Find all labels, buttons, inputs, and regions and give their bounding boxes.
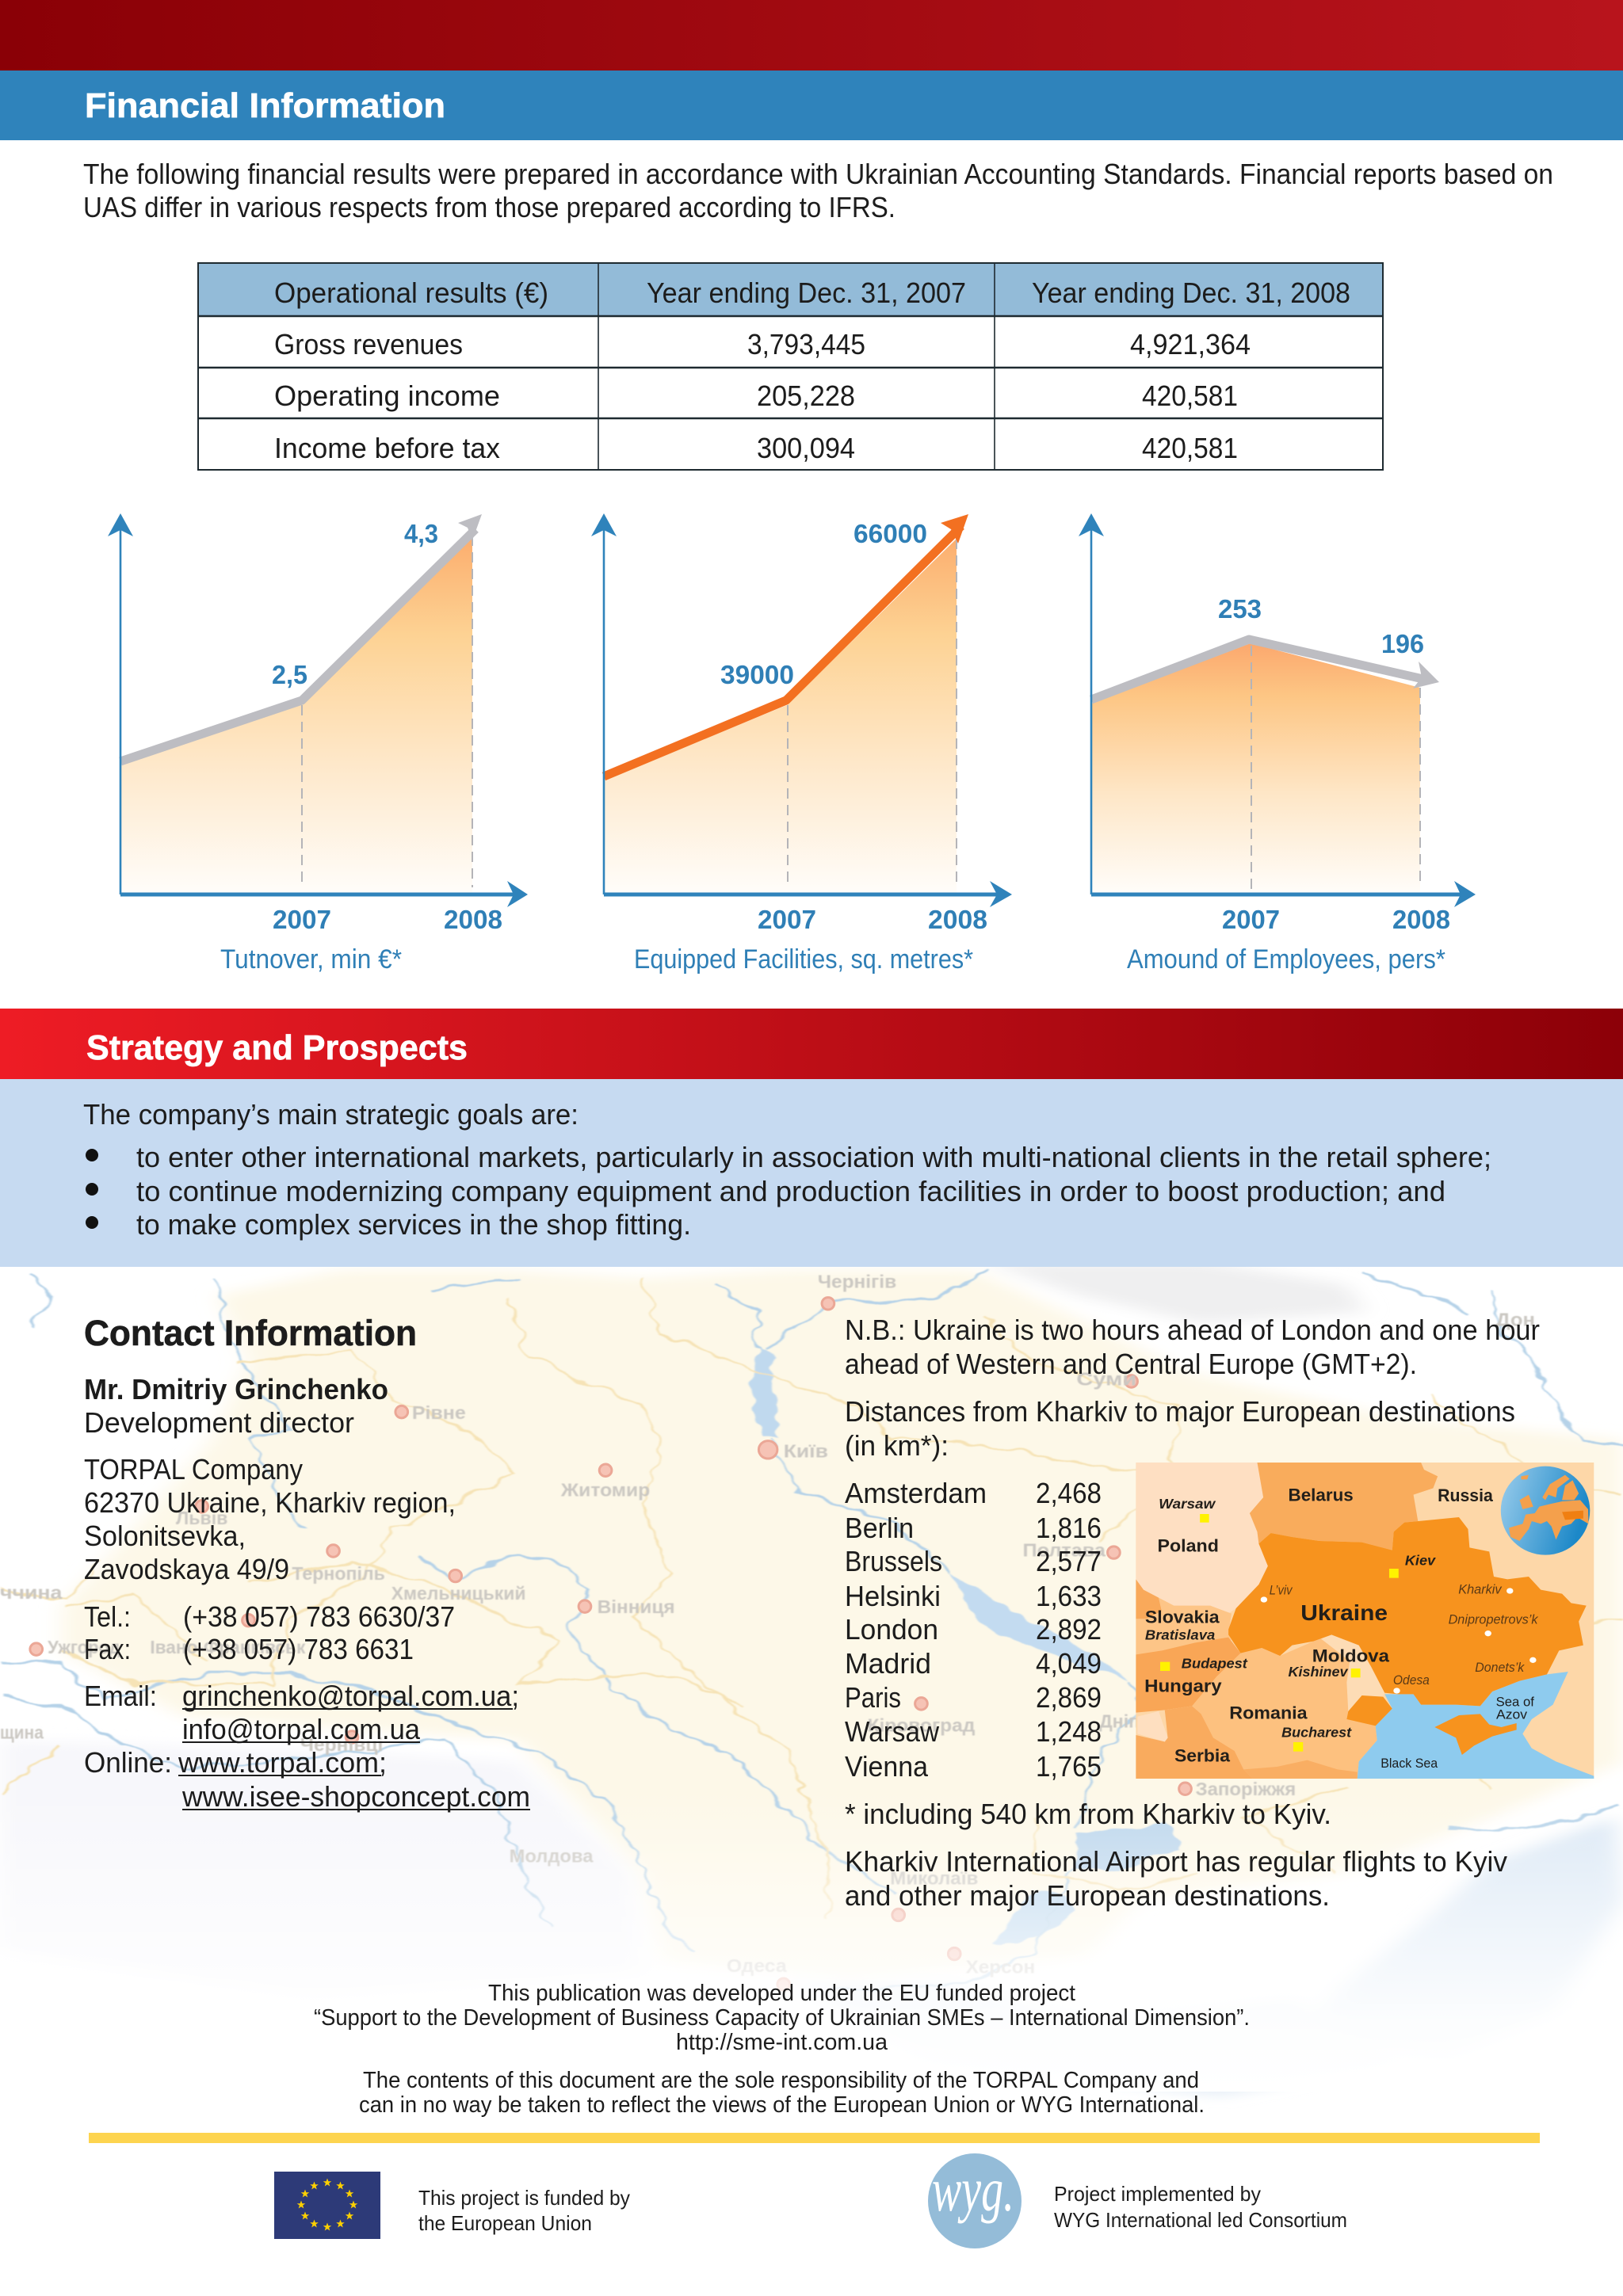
text block: implementation note: Project implemented by	[1054, 2182, 1261, 2206]
phone and fax: (+38 057) 783 6630/37	[183, 1600, 455, 1633]
capital labels: Kishinev	[1289, 1664, 1349, 1680]
background map of Ukraine: щина	[0, 1723, 44, 1743]
map: Ukraine and neighbouring countries	[1136, 1463, 1594, 1779]
email and web links: grinchenko@torpal.com.ua;	[182, 1680, 519, 1712]
background map of Ukraine: Хмельницький	[391, 1584, 526, 1604]
background map of Ukraine: Кіровоград	[868, 1715, 975, 1736]
panel: operational results table: Operating income	[274, 379, 500, 412]
background map of Ukraine: Дон	[1495, 1310, 1535, 1330]
city labels: Odesa	[1393, 1672, 1430, 1688]
table: distances from Kharkiv: 2,577	[1036, 1545, 1102, 1577]
text block: Kyiv footnote and airport	[845, 1798, 1507, 1912]
table: distances from Kharkiv: Paris	[845, 1681, 901, 1714]
table: distances from Kharkiv: 2,869	[1036, 1681, 1102, 1714]
country labels: Hungary	[1144, 1677, 1223, 1696]
background map of Ukraine: Суми	[1076, 1369, 1136, 1390]
background map of Ukraine: Житомир	[560, 1481, 650, 1501]
background map of Ukraine: Чернівці	[300, 1735, 383, 1755]
table: distances from Kharkiv: Brussels	[845, 1545, 942, 1577]
city labels: Donets’k	[1475, 1660, 1525, 1675]
heading: Contact Information: Contact Information	[84, 1313, 417, 1353]
chart: turnover	[108, 513, 528, 974]
heading band: Financial Information	[0, 71, 1623, 140]
phone and fax: (+38 057) 783 6631	[183, 1633, 414, 1665]
panel: operational results table: 300,094	[757, 432, 855, 464]
text block: introduction: UAS differ in various respects from those prepared according to IFRS.	[83, 191, 896, 223]
background map of Ukraine: Дніпр	[1099, 1711, 1151, 1732]
chart: amount of employees: 2007	[1222, 905, 1280, 934]
email and web links: info@torpal.com.ua	[182, 1713, 421, 1745]
panel: red top band	[0, 0, 1623, 71]
sea labels: Sea of	[1496, 1694, 1535, 1709]
table: distances from Kharkiv: 2,468	[1036, 1477, 1102, 1509]
capital labels: Bucharest	[1281, 1725, 1352, 1740]
email and web links: www.isee-shopconcept.com	[181, 1780, 530, 1813]
text block: publication disclaimer: “Support to the Development of Business Capacity of Ukrainian SMEs – International Dimension”.	[314, 2005, 1250, 2031]
city labels	[1261, 1582, 1538, 1694]
panel: operational results table: Operational results (€)	[274, 277, 548, 309]
sea labels: Black Sea	[1381, 1756, 1438, 1771]
capital labels: Warsaw	[1159, 1496, 1216, 1512]
sea labels: Azov	[1496, 1707, 1527, 1722]
background map of Ukraine: Івано-Франківськ	[150, 1638, 306, 1658]
panel: operational results table: Year ending Dec. 31, 2007	[647, 277, 966, 309]
background map of Ukraine: Рівне	[412, 1403, 466, 1424]
country labels: Moldova	[1312, 1647, 1390, 1666]
panel: operational results table	[198, 263, 1383, 470]
background map of Ukraine: Запоріжжя	[1196, 1779, 1296, 1799]
country labels: Belarus	[1289, 1486, 1354, 1505]
table: distances from Kharkiv: 1,816	[1036, 1512, 1102, 1544]
chart: turnover: 2007	[273, 905, 331, 934]
panel: operational results table: 420,581	[1142, 379, 1238, 412]
contact name and role: Development director	[84, 1406, 354, 1439]
capital labels: Kiev	[1405, 1553, 1437, 1568]
background map of Ukraine: Київ	[784, 1442, 828, 1462]
panel: strategic goals: to enter other international markets, particularly in association with multi-national clients in the retail sphere;	[136, 1141, 1491, 1173]
text block: EU funding note: This project is funded by	[418, 2186, 630, 2210]
country labels: Poland	[1158, 1537, 1219, 1556]
table: distances from Kharkiv: 1,633	[1036, 1580, 1102, 1612]
text block: Kyiv footnote and airport: and other major European destinations.	[845, 1879, 1330, 1912]
panel: contact information	[84, 1313, 530, 1813]
country labels: Slovakia	[1145, 1608, 1220, 1627]
panel: strategic goals	[0, 1079, 1623, 1267]
email and web links: Online:	[84, 1746, 172, 1779]
text block: distances heading: Distances from Kharkiv to major European destinations	[845, 1395, 1515, 1428]
chart: amount of employees: 196	[1381, 629, 1424, 658]
panel: strategic goals: to continue modernizing company equipment and production facilities in order to boost production; and	[136, 1175, 1445, 1207]
text block: introduction	[83, 158, 1553, 223]
city labels: Dnipropetrovs’k	[1449, 1611, 1538, 1627]
table: distances from Kharkiv: 1,248	[1036, 1715, 1102, 1748]
background map of Ukraine: Чернігів	[818, 1272, 896, 1292]
chart: equipped facilities: 2007	[758, 905, 816, 934]
sea labels	[1381, 1694, 1535, 1771]
text block: time zone note: N.B.: Ukraine is two hours ahead of London and one hour	[845, 1314, 1540, 1346]
background map of Ukraine: Херсон	[966, 1958, 1035, 1978]
text block: publication disclaimer: This publication was developed under the EU funded project	[488, 1981, 1075, 2006]
table: distances from Kharkiv: Amsterdam	[845, 1477, 987, 1509]
chart: turnover: Tutnover, min €*	[220, 944, 402, 974]
table: distances from Kharkiv: 2,892	[1036, 1613, 1102, 1646]
capital labels	[1145, 1496, 1437, 1752]
text block: publication disclaimer: http://sme-int.com.ua	[676, 2030, 888, 2055]
panel: strategic goals: to make complex services in the shop fitting.	[136, 1208, 691, 1241]
panel: operational results table: 420,581	[1142, 432, 1238, 464]
postal address: Zavodskaya 49/9	[84, 1553, 289, 1585]
table: distances from Kharkiv: Madrid	[845, 1647, 931, 1680]
chart: turnover: 4,3	[404, 519, 438, 548]
panel: operational results table: 205,228	[757, 379, 855, 412]
text block: publication disclaimer	[314, 1981, 1250, 2118]
capital labels: Bratislava	[1145, 1627, 1215, 1642]
chart: equipped facilities: 2008	[928, 905, 987, 934]
phone and fax	[84, 1600, 455, 1665]
contact name and role	[84, 1373, 388, 1439]
table: distances from Kharkiv: Vienna	[845, 1750, 929, 1783]
background map of Ukraine	[0, 1262, 1623, 2096]
text block: distances heading	[845, 1395, 1515, 1462]
heading band: Strategy and Prospects	[0, 1009, 1623, 1079]
chart: turnover: 2008	[444, 905, 502, 934]
background map of Ukraine: Полтава	[1022, 1540, 1106, 1561]
phone and fax: Tel.:	[84, 1600, 131, 1633]
icon: EU flag	[274, 2172, 380, 2239]
heading band: Financial Information: Financial Information	[85, 86, 445, 125]
background map of Ukraine: Миколаїв	[890, 1868, 978, 1889]
text block: EU funding note: the European Union	[418, 2211, 592, 2235]
panel: operational results table: 4,921,364	[1130, 328, 1251, 360]
postal address	[84, 1453, 456, 1585]
background map of Ukraine: ччина	[0, 1583, 63, 1603]
table: distances from Kharkiv: 4,049	[1036, 1647, 1102, 1680]
table: distances from Kharkiv: Berlin	[845, 1512, 914, 1544]
background map of Ukraine: Тернопіль	[292, 1564, 385, 1584]
panel: strategic goals: The company’s main strategic goals are:	[83, 1098, 579, 1131]
capital labels: Budapest	[1182, 1656, 1248, 1671]
panel: operational results table: Income before tax	[274, 432, 500, 464]
text block: time zone note	[845, 1314, 1540, 1380]
postal address: TORPAL Company	[84, 1453, 303, 1486]
heading band: Strategy and Prospects: Strategy and Prospects	[86, 1028, 468, 1067]
text block: Kyiv footnote and airport: Kharkiv International Airport has regular flights to Kyiv	[845, 1845, 1507, 1878]
background map of Ukraine: Вінниця	[598, 1597, 675, 1617]
country labels: Ukraine	[1300, 1601, 1388, 1625]
country labels	[1144, 1486, 1494, 1766]
panel: operational results table: Gross revenues	[274, 328, 463, 360]
text block: EU funding note	[418, 2186, 630, 2235]
background map of Ukraine: Одеса	[727, 1956, 787, 1977]
postal address: 62370 Ukraine, Kharkiv region,	[84, 1486, 456, 1519]
table: distances from Kharkiv: Warsaw	[845, 1715, 940, 1748]
text block: implementation note	[1054, 2182, 1347, 2232]
chart: amount of employees	[1079, 513, 1476, 974]
email and web links	[84, 1680, 530, 1813]
chart: equipped facilities: Equipped Facilities, sq. metres*	[634, 944, 973, 974]
city labels: L’viv	[1270, 1583, 1293, 1597]
table: distances from Kharkiv: 1,765	[1036, 1750, 1102, 1783]
country labels: Serbia	[1174, 1747, 1231, 1766]
logo: WYG	[928, 2153, 1022, 2248]
contact name and role: Mr. Dmitriy Grinchenko	[84, 1373, 388, 1405]
chart: equipped facilities: 39000	[720, 660, 794, 689]
chart: amount of employees: 253	[1218, 594, 1262, 624]
phone and fax: Fax:	[84, 1633, 131, 1665]
chart: equipped facilities: 66000	[854, 519, 927, 548]
text block: distances heading: (in km*):	[845, 1429, 949, 1462]
chart: turnover: 2,5	[272, 660, 307, 689]
postal address: Solonitsevka,	[84, 1520, 246, 1552]
table: distances from Kharkiv	[845, 1477, 1102, 1783]
chart: equipped facilities	[591, 513, 1012, 974]
table: distances from Kharkiv: London	[845, 1613, 938, 1646]
text block: time zone note: ahead of Western and Central Europe (GMT+2).	[845, 1348, 1417, 1380]
email and web links: Email:	[84, 1680, 157, 1712]
table: distances from Kharkiv: Helsinki	[845, 1580, 941, 1612]
text block: implementation note: WYG International led Consortium	[1054, 2208, 1347, 2232]
background map of Ukraine: Ужгород	[48, 1638, 120, 1658]
background map of Ukraine: Молдова	[510, 1846, 594, 1867]
logo: WYG: wyg.	[932, 2155, 1014, 2224]
email and web links: www.torpal.com;	[178, 1746, 387, 1779]
text block: introduction: The following financial results were prepared in accordance with Ukrainian Accounting Standards. Financial reports based on	[83, 158, 1553, 190]
panel: operational results table: Year ending Dec. 31, 2008	[1032, 277, 1350, 309]
panel: operational results table: 3,793,445	[747, 328, 865, 360]
background map of Ukraine: Львів	[176, 1508, 227, 1528]
chart: amount of employees: Amound of Employees, pers*	[1127, 944, 1445, 974]
country labels: Russia	[1438, 1486, 1494, 1506]
text block: Kyiv footnote and airport: * including 540 km from Kharkiv to Kyiv.	[845, 1798, 1331, 1830]
text block: publication disclaimer: The contents of this document are the sole responsibility of the TORPAL Company and	[363, 2068, 1199, 2093]
city labels: Kharkiv	[1458, 1582, 1502, 1596]
country labels: Romania	[1229, 1704, 1308, 1723]
chart: amount of employees: 2008	[1392, 905, 1450, 934]
text block: publication disclaimer: can in no way be taken to reflect the views of the European Union or WYG International.	[359, 2092, 1205, 2118]
globe inset	[1501, 1466, 1590, 1555]
